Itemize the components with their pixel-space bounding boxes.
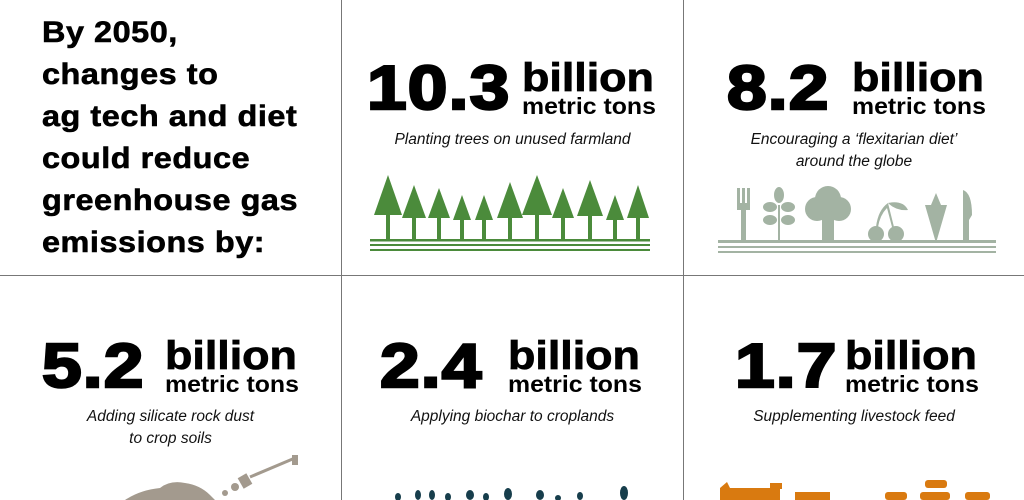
stat: 2.4 billion: 2.4 <box>380 332 483 401</box>
stat: 8.2 billion: billion <box>852 56 984 100</box>
stat: 10.3 billion: metric tons <box>522 93 656 119</box>
icon: shovel and rock dust <box>125 455 298 500</box>
stat: 2.4 billion: billion <box>508 334 640 378</box>
title: By 2050, <box>42 16 178 49</box>
stat: 5.2 billion: metric tons <box>165 371 299 397</box>
stat: 10.3 billion: 10.3 <box>367 54 510 123</box>
stat: 5.2 billion: 5.2 <box>42 332 145 401</box>
title <box>42 16 298 259</box>
caption: rock dust: Adding silicate rock dust <box>87 408 254 425</box>
title: emissions by: <box>42 226 265 259</box>
caption: flexitarian: around the globe <box>796 153 912 170</box>
stat: 5.2 billion <box>42 332 299 401</box>
stat: 1.7 billion: 1.7 <box>735 332 838 401</box>
stat: 1.7 billion: metric tons <box>845 371 979 397</box>
caption: flexitarian: Encouraging a ‘flexitarian diet’ <box>751 131 957 148</box>
caption: rock dust <box>86 408 255 447</box>
stat: 10.3 billion: billion <box>522 56 654 100</box>
icon: food <box>718 186 996 253</box>
caption: rock dust: to crop soils <box>129 430 212 447</box>
stat: 2.4 billion <box>380 332 642 401</box>
stat: 1.7 billion: billion <box>845 334 977 378</box>
stat: 5.2 billion: billion <box>165 334 297 378</box>
title: greenhouse gas <box>42 184 298 217</box>
caption: livestock feed: Supplementing livestock feed <box>753 408 955 425</box>
icon: trees <box>370 175 650 251</box>
caption: trees: Planting trees on unused farmland <box>394 131 631 148</box>
icon: biochar dots <box>395 486 628 500</box>
icon: livestock <box>720 480 990 500</box>
caption: biochar: Applying biochar to croplands <box>411 408 614 425</box>
title: changes to <box>42 58 218 91</box>
title: could reduce <box>42 142 250 175</box>
caption: flexitarian <box>751 131 958 170</box>
stat: 8.2 billion <box>727 54 986 123</box>
stat: 8.2 billion: 8.2 <box>727 54 830 123</box>
title: ag tech and diet <box>42 100 297 133</box>
stat: 8.2 billion: metric tons <box>852 93 986 119</box>
stat: 2.4 billion: metric tons <box>508 371 642 397</box>
stat: 1.7 billion <box>735 332 979 401</box>
stat: 10.3 billion <box>367 54 656 123</box>
